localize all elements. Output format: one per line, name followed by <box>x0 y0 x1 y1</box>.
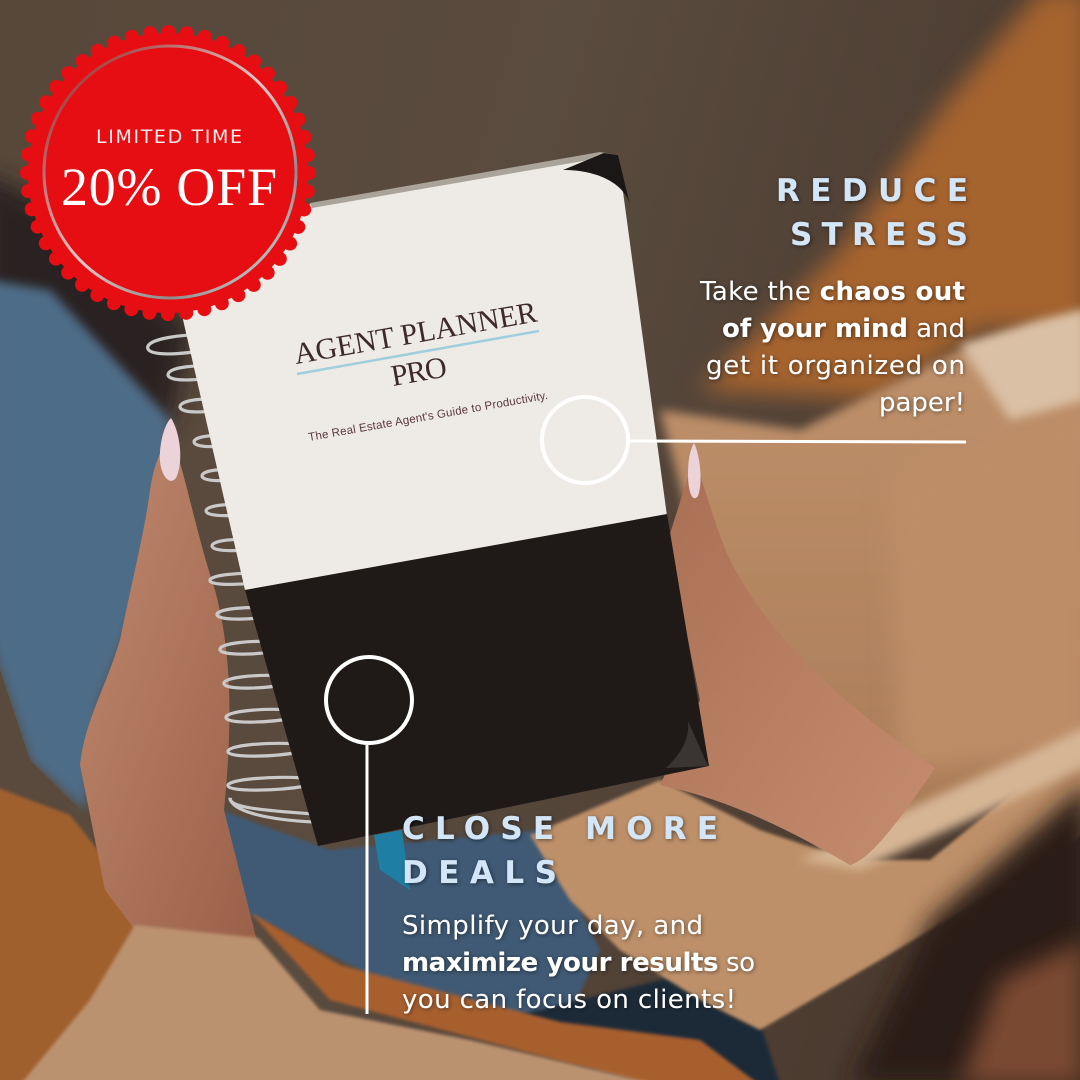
dark hair bottom right <box>850 780 1080 1080</box>
heading <box>402 811 718 891</box>
blanket foreground <box>530 730 1080 1030</box>
right hand <box>660 443 935 865</box>
cover: black lower part <box>245 514 709 846</box>
book subtitle: The Real Estate Agent's Guide to Productivity. <box>307 390 549 444</box>
body text: get it organized on <box>706 351 965 381</box>
orange leather couch <box>700 0 1080 400</box>
top edge of pages <box>310 152 618 208</box>
marker circle and leader line <box>326 657 412 1014</box>
book title: AGENT PLANNER <box>291 296 539 371</box>
jeans lower <box>215 810 600 1035</box>
leather bag left <box>0 785 150 1080</box>
discount badge <box>27 32 309 314</box>
marker circle and leader line <box>542 397 966 483</box>
body text: maximize your results so <box>402 948 755 978</box>
blue spine item <box>374 830 410 890</box>
dark shadow left <box>0 170 190 430</box>
jeans left <box>0 280 170 810</box>
corner protector top right <box>563 153 630 205</box>
heading: DEALS <box>402 855 557 891</box>
body text <box>402 911 755 1015</box>
corner protector bottom right <box>666 721 708 768</box>
title underline <box>297 331 539 374</box>
left hand <box>80 418 258 945</box>
tan blanket right <box>660 310 1080 850</box>
spiral binding <box>148 335 314 822</box>
dark area under strap <box>520 960 780 1080</box>
brown floor behind arm <box>0 640 80 810</box>
callout: reduce stress <box>542 173 968 483</box>
body text: Take the chaos out <box>699 277 965 307</box>
heading: REDUCE <box>776 173 968 209</box>
leather strap <box>250 912 760 1080</box>
20% off: 20% OFF <box>61 157 277 217</box>
body text: of your mind and <box>722 314 965 344</box>
sleeve bottom left <box>20 925 660 1080</box>
body text: you can focus on clients! <box>402 985 736 1015</box>
heading: STRESS <box>790 217 968 253</box>
fingernail right <box>688 443 701 498</box>
scalloped red seal <box>27 32 309 314</box>
planner book: PRO <box>388 351 449 393</box>
body text: Simplify your day, and <box>402 911 703 941</box>
body text: paper! <box>879 388 965 418</box>
body text <box>699 277 965 418</box>
limited time label: LIMITED TIME <box>96 126 242 148</box>
callout: close more deals <box>326 657 755 1015</box>
cover: white upper part <box>162 155 667 590</box>
planner book <box>162 152 709 846</box>
metallic ring <box>44 46 296 298</box>
heading <box>776 173 968 253</box>
fingernail left <box>160 418 180 481</box>
heading: CLOSE MORE <box>402 811 718 847</box>
